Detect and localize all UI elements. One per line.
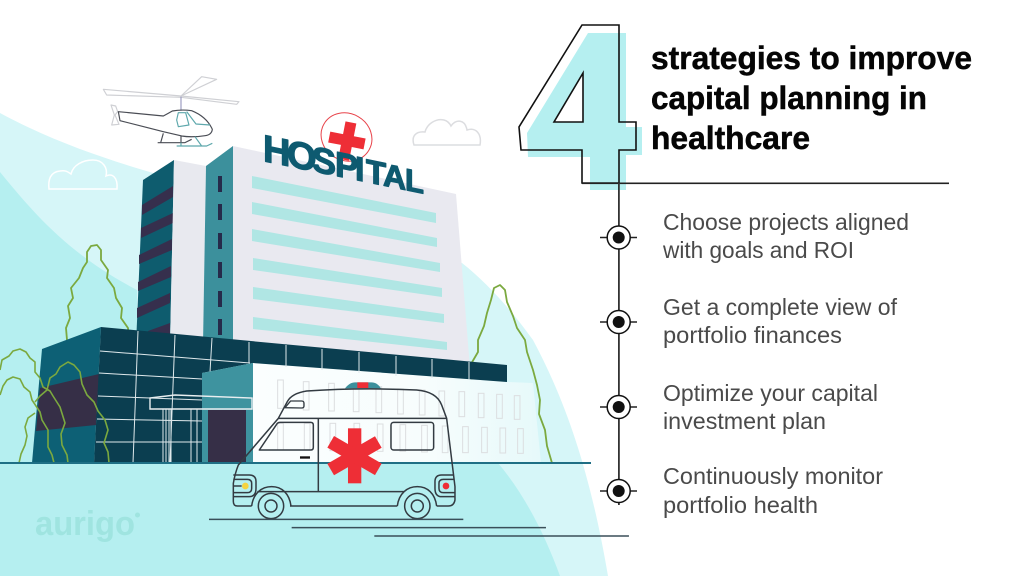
background: light teal hill — [0, 113, 608, 576]
hospital sign: H — [263, 127, 290, 175]
road lines — [209, 519, 629, 536]
strategy 2 — [663, 294, 897, 348]
strategy 3 — [663, 380, 878, 434]
entrance door — [208, 410, 246, 463]
cloud left — [49, 160, 117, 189]
main tower: side windows — [218, 176, 222, 335]
tower left: light face — [170, 160, 206, 345]
tower left: dark side — [136, 160, 174, 345]
main tower: window bands — [252, 176, 447, 350]
marker 4 — [600, 480, 637, 502]
strategy 2: Get a complete view of — [663, 294, 897, 320]
lower block: dark glass face — [94, 327, 507, 463]
hospital sign: S — [312, 138, 336, 184]
hospital sign: A — [383, 157, 406, 197]
hospital sign: T — [366, 153, 386, 194]
main tower: teal side — [203, 146, 233, 345]
timeline line — [618, 183, 620, 505]
ambulance wheels — [252, 487, 437, 506]
strategy 4: Continuously monitor — [663, 463, 883, 489]
heading — [651, 40, 972, 156]
marker 2 — [600, 310, 637, 334]
annex building — [253, 363, 541, 463]
lower block: side face — [32, 327, 101, 463]
heading: healthcare — [651, 120, 810, 156]
tree behind building left — [66, 245, 129, 340]
marker 1 — [600, 226, 637, 249]
hospital sign: O — [287, 132, 317, 181]
big number 4 fill — [527, 33, 642, 190]
glass grid lines — [96, 331, 469, 463]
strategy 1: with goals and ROI — [662, 237, 854, 263]
strategy 4 — [663, 463, 883, 518]
ground — [0, 463, 560, 576]
ground line — [0, 462, 591, 464]
ambulance roof light — [345, 382, 381, 388]
hospital sign: L — [405, 162, 424, 201]
ambulance lights — [233, 475, 256, 497]
strategy 2: portfolio finances — [663, 322, 842, 348]
strategy 4: portfolio health — [663, 492, 818, 518]
heading rule — [582, 182, 949, 184]
tower left: stripes — [137, 186, 173, 336]
aurigo logo: aurigo — [35, 505, 135, 543]
strategy 1: Choose projects aligned — [663, 209, 909, 235]
hospital sign: I — [355, 150, 364, 190]
ambulance door handle — [300, 456, 310, 459]
helicopter — [103, 77, 239, 146]
big number 4 outline — [519, 25, 636, 183]
cloud right — [413, 120, 480, 145]
ambulance body — [233, 389, 455, 506]
tree right — [457, 285, 552, 463]
heading: strategies to improve — [651, 40, 972, 76]
ambulance — [209, 382, 629, 536]
entrance columns — [163, 409, 197, 463]
strategy 3: Optimize your capital — [663, 380, 878, 406]
main tower: front face — [233, 146, 470, 368]
annex windows — [278, 380, 523, 453]
red cross sign — [312, 104, 381, 170]
trees bottom left — [0, 349, 109, 463]
marker 3 — [600, 396, 637, 418]
entrance awning — [150, 395, 252, 409]
strategy 3: investment plan — [663, 408, 826, 434]
ambulance star — [327, 428, 382, 483]
background: darker teal hill — [0, 172, 137, 463]
ambulance windows — [259, 422, 313, 450]
lower block: purple band — [36, 374, 99, 431]
hospital sign: P — [335, 145, 358, 188]
entrance block — [202, 363, 253, 463]
heading: capital planning in — [651, 80, 927, 116]
strategy 1 — [662, 209, 909, 263]
ambulance dividers — [257, 418, 446, 492]
